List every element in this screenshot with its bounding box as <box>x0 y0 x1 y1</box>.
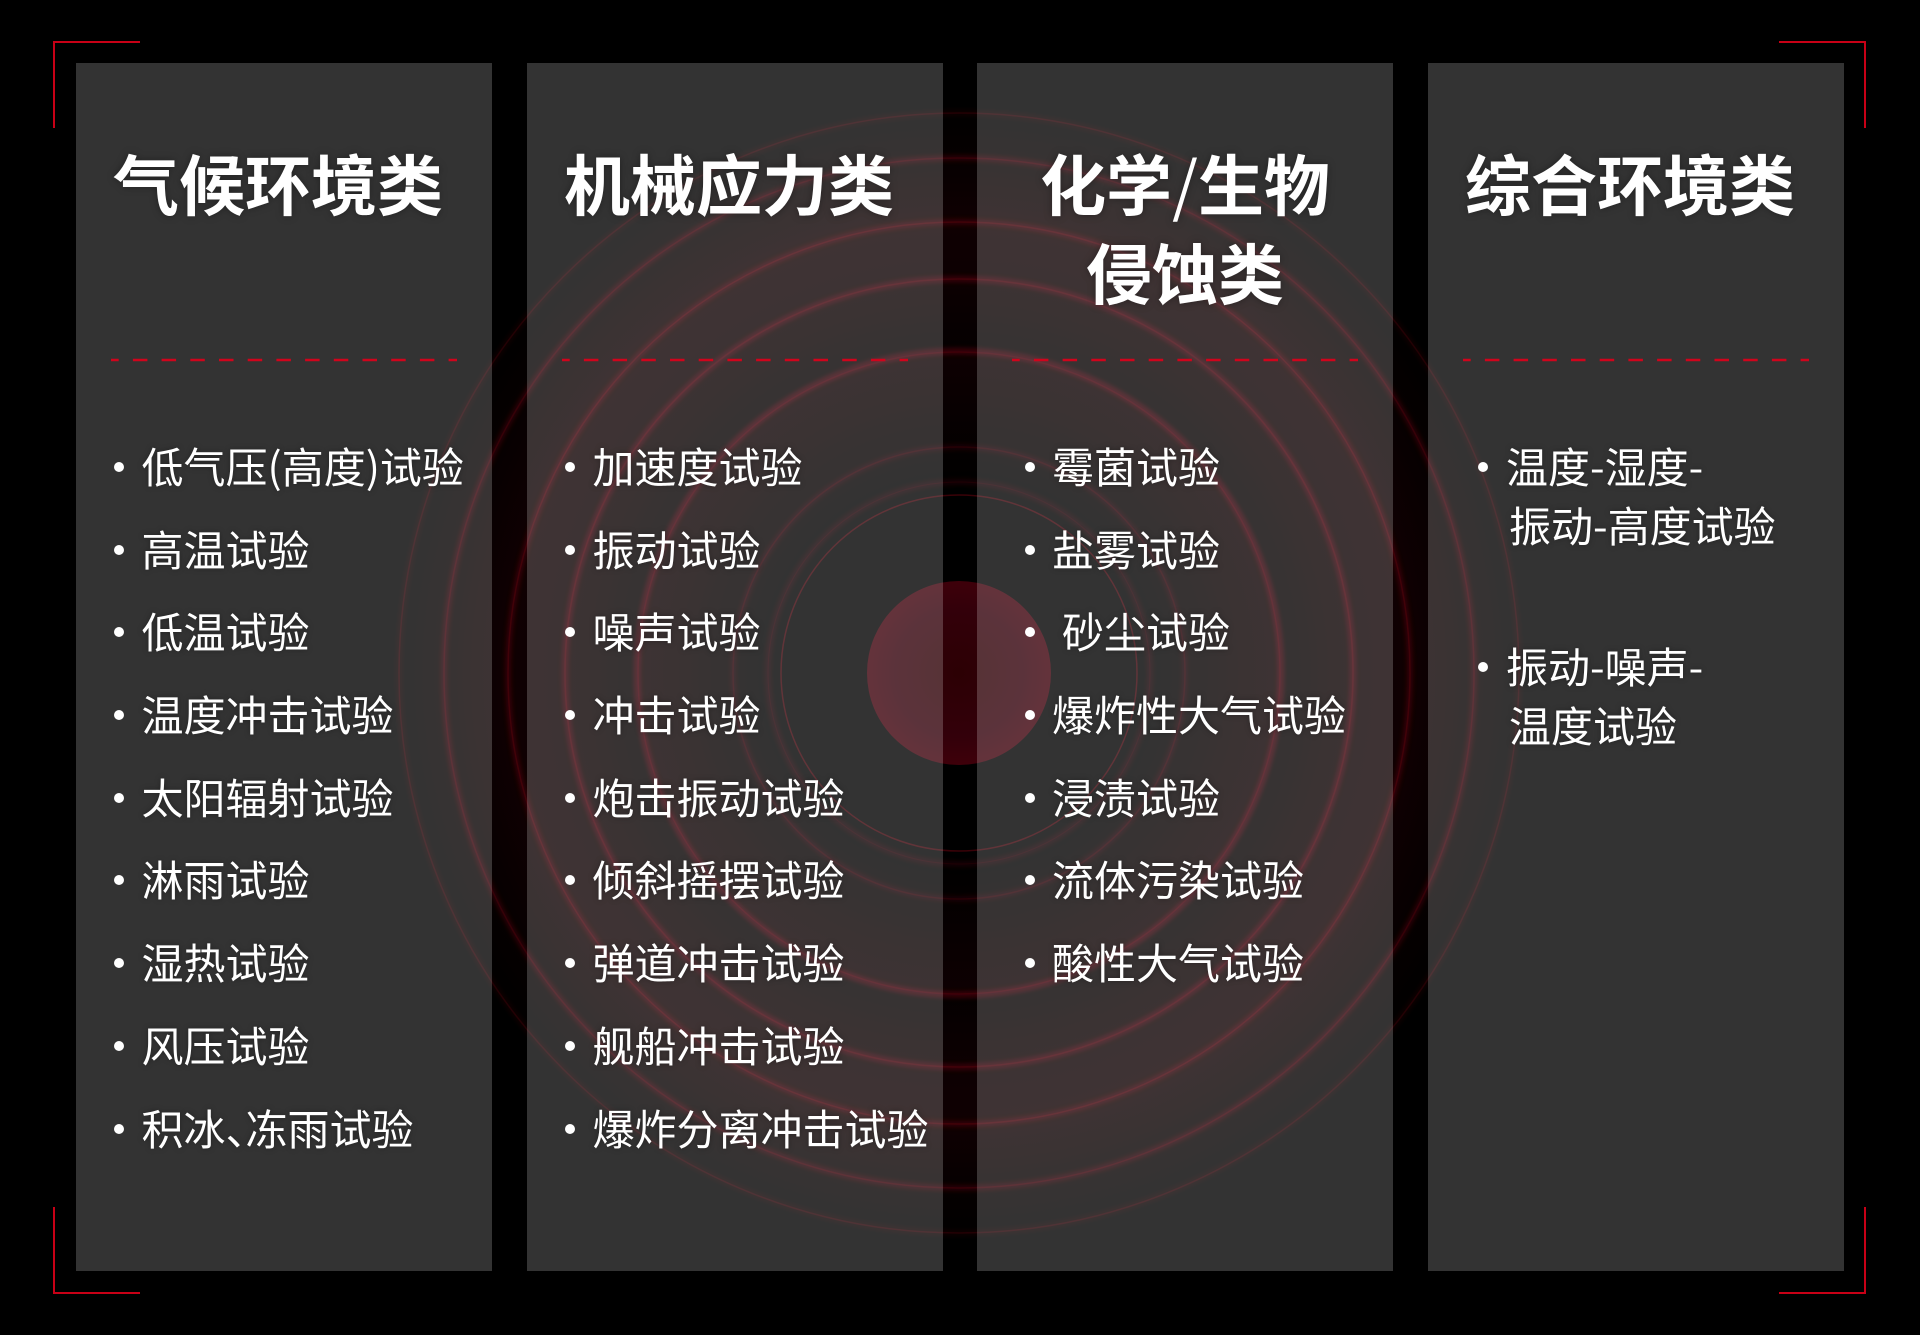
heading: 化学/生物侵蚀类: 化学/生物 <box>1040 134 1330 230</box>
list: mechanical stress tests: 爆炸分离冲击试验 <box>592 1096 929 1158</box>
list: mechanical stress tests: 倾斜摇摆试验 <box>592 848 845 908</box>
list: chemical and biological tests: 流体污染试验 <box>1052 848 1304 908</box>
list: mechanical stress tests: 加速度试验 <box>592 434 803 496</box>
list: climate tests <box>114 434 464 1158</box>
list: climate tests: 温度冲击试验 <box>142 682 394 744</box>
panel: 综合环境类 <box>1428 63 1844 1271</box>
list: chemical and biological tests <box>1025 434 1346 992</box>
heading: 综合环境类: 综合环境类 <box>1465 134 1795 230</box>
list: climate tests: 低温试验 <box>142 600 310 660</box>
list: chemical and biological tests: 霉菌试验 <box>1052 434 1220 496</box>
list: mechanical stress tests: 冲击试验 <box>592 682 761 744</box>
list: combined environment tests <box>1478 434 1776 754</box>
corner bracket: bottom right <box>1779 1207 1866 1294</box>
list: combined environment tests: 温度-湿度- <box>1506 434 1703 496</box>
list: mechanical stress tests: 噪声试验 <box>592 600 761 660</box>
list: chemical and biological tests: 酸性大气试验 <box>1052 930 1304 992</box>
list: climate tests: 风压试验 <box>142 1014 310 1074</box>
corner bracket: bottom left <box>53 1207 140 1294</box>
list: mechanical stress tests: 舰船冲击试验 <box>592 1014 845 1074</box>
list: combined environment tests: 振动-噪声- <box>1506 634 1703 696</box>
heading: 机械应力类: 机械应力类 <box>564 134 894 230</box>
panel: 机械应力类 <box>527 63 943 1271</box>
heading: 化学/生物侵蚀类: 侵蚀类 <box>1086 222 1284 318</box>
panel: 气候环境类 <box>76 63 492 1271</box>
list: climate tests: 湿热试验 <box>142 930 310 992</box>
list: combined environment tests: 振动-高度试验 <box>1509 494 1776 554</box>
corner bracket: top right <box>1779 41 1866 128</box>
list: chemical and biological tests: 浸渍试验 <box>1052 766 1220 826</box>
list: combined environment tests: 温度试验 <box>1509 694 1677 754</box>
corner bracket: top left <box>53 41 140 128</box>
list: climate tests: 低气压(高度)试验 <box>142 434 464 496</box>
panel: 化学/生物侵蚀类 <box>977 63 1393 1271</box>
list: mechanical stress tests: 炮击振动试验 <box>592 766 845 826</box>
list: mechanical stress tests: 振动试验 <box>592 518 761 578</box>
list: chemical and biological tests: 盐雾试验 <box>1052 518 1220 578</box>
list: climate tests: 太阳辐射试验 <box>142 766 394 826</box>
list: mechanical stress tests: 弹道冲击试验 <box>592 930 845 992</box>
list: mechanical stress tests <box>565 434 929 1158</box>
list: climate tests: 高温试验 <box>142 518 310 578</box>
list: chemical and biological tests: 砂尘试验 <box>1062 600 1230 660</box>
heading: 化学/生物侵蚀类 <box>1040 134 1330 318</box>
heading: 气候环境类: 气候环境类 <box>113 134 443 230</box>
list: climate tests: 淋雨试验 <box>142 848 310 908</box>
list: climate tests: 积冰、冻雨试验 <box>142 1096 414 1158</box>
list: chemical and biological tests: 爆炸性大气试验 <box>1052 682 1346 744</box>
